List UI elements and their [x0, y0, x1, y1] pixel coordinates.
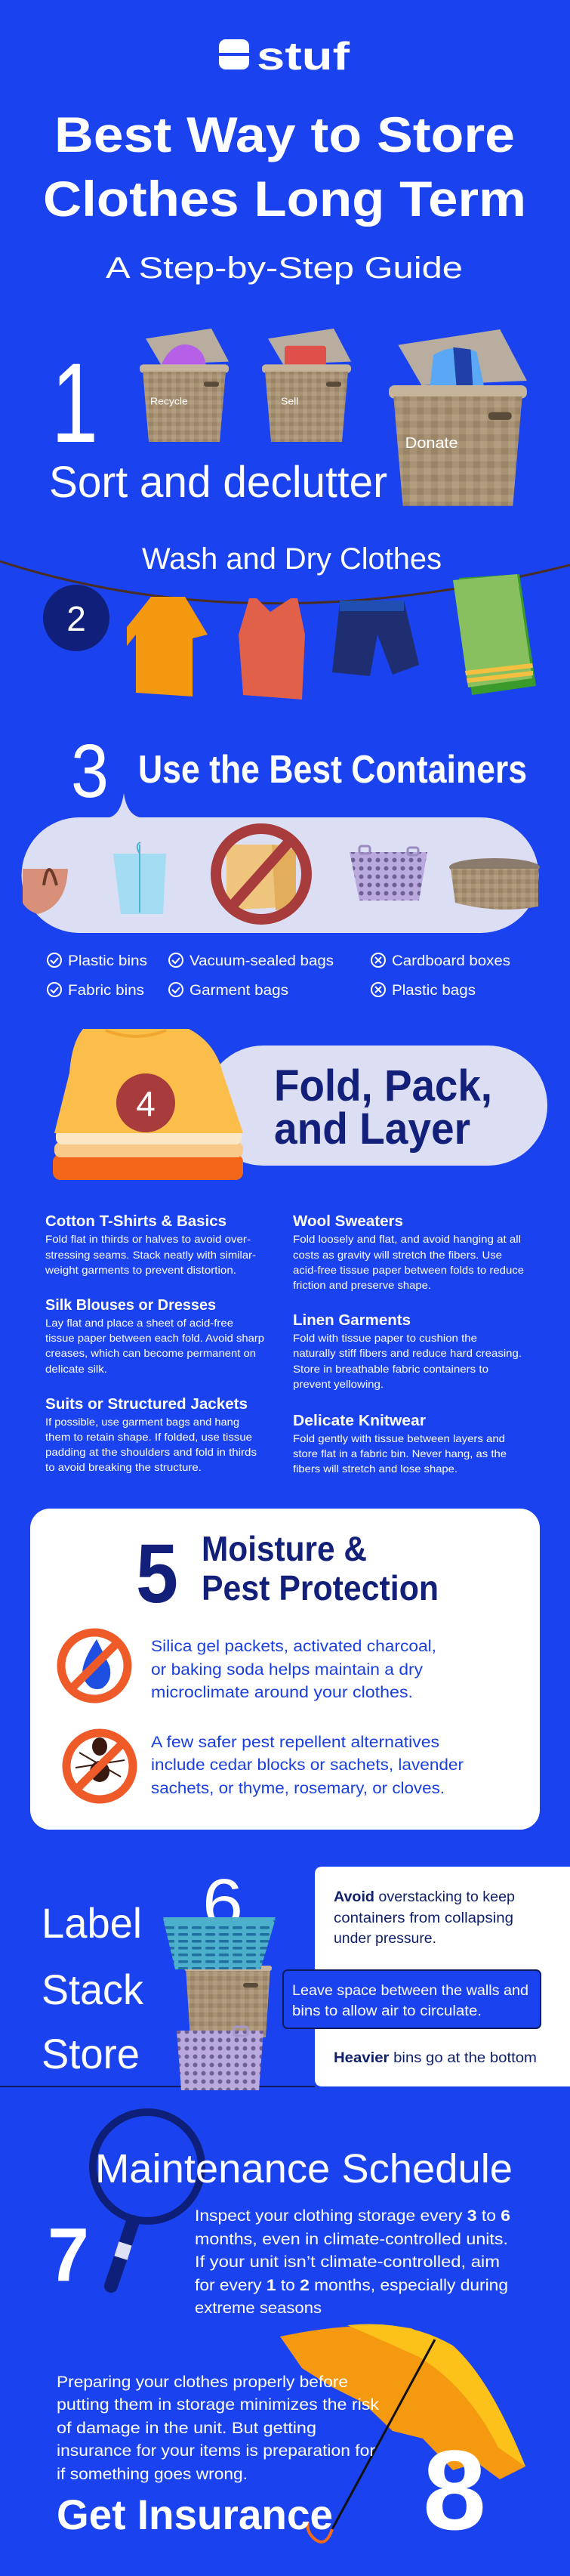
- callout: leave space: bins to allow air to circulate.: [292, 2003, 482, 2019]
- step 8 heading: Get Insurance: [57, 2491, 333, 2538]
- text block: left column tips: creases, which can become permanent on: [45, 1347, 256, 1359]
- step 6 headings: Label: [42, 1899, 142, 1947]
- icon: garment bag: [113, 842, 166, 914]
- text: insurance: if something goes wrong.: [57, 2466, 248, 2483]
- text block: left column tips: Lay flat and place a sheet of acid-free: [45, 1317, 233, 1329]
- step 7 heading: Maintenance Schedule: [95, 2146, 513, 2191]
- tank top: [239, 598, 305, 700]
- step 7 number: 7: [48, 2213, 89, 2297]
- icon: bowl bag: [23, 869, 68, 914]
- basket: donate: Donate: [405, 434, 458, 452]
- panel: moisture & pest protection: 5: [136, 1527, 178, 1620]
- title: Best Way to Store: [54, 107, 515, 162]
- text block: right column tips: naturally stiff fibers and reduce hard creasing.: [293, 1347, 522, 1359]
- text: insurance: putting them in storage minimizes the risk: [57, 2396, 380, 2414]
- panel: stacking tips: under pressure.: [334, 1931, 436, 1947]
- step 6 headings: Stack: [42, 1966, 144, 2013]
- text block: left column tips: tissue paper between each fold. Avoid sharp: [45, 1332, 264, 1344]
- panel: moisture & pest protection: Moisture &: [202, 1529, 367, 1568]
- text: pests: [151, 1734, 464, 1797]
- icon: stacked bins: [163, 1917, 276, 2090]
- text: moisture: microclimate around your clothes.: [151, 1684, 413, 1701]
- text: moisture: Silica gel packets, activated charcoal,: [151, 1638, 436, 1655]
- step 8 number: 8: [423, 2426, 486, 2553]
- panel: moisture & pest protection: [30, 1509, 540, 1830]
- text block: left column tips: stressing seams. Stack neatly with similar-: [45, 1249, 256, 1261]
- step 6 number: 6: [202, 1866, 243, 1941]
- checklist: [48, 953, 510, 999]
- text: insurance: [57, 2374, 380, 2483]
- basket: sell: [262, 329, 351, 442]
- basket: donate: [389, 329, 527, 506]
- panel: fold pack layer: Fold, Pack,: [274, 1061, 492, 1110]
- text: insurance: insurance for your items is preparation for: [57, 2442, 375, 2460]
- text block: right column tips: Fold with tissue paper to cushion the: [293, 1332, 477, 1344]
- text: maintenance: Inspect your clothing storage every 3 to 6: [195, 2207, 510, 2225]
- text: maintenance: months, even in climate-controlled units.: [195, 2231, 508, 2248]
- logo: [219, 35, 350, 79]
- step 2 badge: 2: [66, 599, 86, 638]
- panel: stacking tips: containers from collapsing: [334, 1910, 513, 1926]
- text block: right column tips: Linen Garments: [293, 1312, 411, 1329]
- text block: right column tips: Delicate Knitwear: [293, 1413, 426, 1429]
- icon: no cardboard box: [216, 829, 307, 919]
- title: Clothes Long Term: [43, 171, 526, 227]
- icon: folded shirts stack: 4: [136, 1084, 156, 1123]
- text: moisture: [151, 1638, 436, 1701]
- icon: magnifier: [93, 2112, 202, 2286]
- checklist: Vacuum-sealed bags: [189, 953, 334, 969]
- text block: right column tips: store flat in a fabric bin. Never hang, as the: [293, 1447, 507, 1459]
- text: pests: sachets, or thyme, rosemary, or cloves.: [151, 1780, 445, 1797]
- basket: recycle: Recycle: [150, 396, 188, 407]
- text: moisture: or baking soda helps maintain a dry: [151, 1661, 424, 1679]
- panel: moisture & pest protection: Pest Protection: [202, 1568, 439, 1608]
- step 2 badge: [43, 585, 109, 651]
- callout: leave space: Leave space between the walls and: [292, 1983, 528, 1999]
- checklist: Plastic bins: [68, 953, 147, 969]
- text block: left column tips: padding at the shoulders and fold in thirds: [45, 1446, 257, 1458]
- text: maintenance: [195, 2207, 510, 2317]
- text block: right column tips: Wool Sweaters: [293, 1213, 403, 1230]
- text: insurance: of damage in the unit. But getting: [57, 2420, 316, 2437]
- text block: left column tips: Cotton T-Shirts & Basics: [45, 1213, 226, 1230]
- clothesline: [0, 561, 570, 700]
- icon: folded shirts stack: [53, 1029, 243, 1180]
- text: maintenance: If your unit isn’t climate-controlled, aim: [195, 2253, 500, 2271]
- text block: left column tips: Fold flat in thirds or halves to avoid over-: [45, 1233, 251, 1245]
- icon: no water: [61, 1632, 128, 1699]
- checklist: Plastic bags: [392, 983, 476, 999]
- text block: right column tips: prevent yellowing.: [293, 1378, 384, 1390]
- text: pests: include cedar blocks or sachets, lavender: [151, 1756, 464, 1774]
- text block: left column tips: If possible, use garment bags and hang: [45, 1416, 239, 1428]
- panel: fold pack layer: and Layer: [274, 1104, 470, 1154]
- checklist: Cardboard boxes: [392, 953, 510, 969]
- text block: left column tips: delicate silk.: [45, 1363, 107, 1375]
- text block: right column tips: acid-free tissue paper between folds to reduce: [293, 1264, 524, 1276]
- panel: fold pack layer: [53, 1029, 547, 1180]
- step 2 heading: Wash and Dry Clothes: [142, 542, 442, 576]
- icon: purple basket: [350, 846, 427, 900]
- text: pests: A few safer pest repellent alternatives: [151, 1734, 439, 1751]
- title: [43, 107, 526, 227]
- text block: right column tips: Fold gently with tissue between layers and: [293, 1432, 505, 1444]
- panel: stacking tips: Avoid overstacking to keep: [334, 1889, 515, 1905]
- text block: left column tips: [45, 1213, 264, 1473]
- checklist: Fabric bins: [68, 983, 144, 999]
- text block: left column tips: Silk Blouses or Dresses: [45, 1297, 216, 1314]
- text block: right column tips: [293, 1213, 524, 1475]
- text block: left column tips: them to retain shape. If folded, use tissue: [45, 1431, 252, 1443]
- panel: stacking tips: Heavier bins go at the bottom: [334, 2050, 537, 2066]
- text block: right column tips: friction and preserve shape.: [293, 1279, 431, 1291]
- t-shirt: [127, 597, 208, 697]
- text: insurance: Preparing your clothes properly before: [57, 2374, 348, 2391]
- text block: left column tips: weight garments to prevent distortion.: [45, 1264, 236, 1276]
- text block: right column tips: fibers will stretch and lose shape.: [293, 1463, 458, 1475]
- icon: no pests: [66, 1733, 133, 1799]
- towel: [453, 574, 536, 695]
- step 6 headings: [42, 1899, 144, 2077]
- basket: sell: Sell: [281, 396, 298, 407]
- text block: left column tips: Suits or Structured Jackets: [45, 1396, 248, 1413]
- shorts: [332, 601, 419, 676]
- checklist: Garment bags: [189, 983, 288, 999]
- step 1 number: 1: [51, 339, 98, 466]
- step 6 headings: Store: [42, 2030, 140, 2077]
- panel: containers: [22, 793, 540, 933]
- panel: stacking tips: [283, 1867, 570, 2086]
- text block: right column tips: costs as gravity will stretch the fibers. Use: [293, 1249, 502, 1261]
- icon: umbrella: [280, 2324, 525, 2542]
- text block: left column tips: to avoid breaking the structure.: [45, 1461, 202, 1473]
- text block: right column tips: Store in breathable fabric containers to: [293, 1363, 488, 1375]
- step 3 number: 3: [71, 729, 109, 814]
- text block: right column tips: Fold loosely and flat, and avoid hanging at all: [293, 1233, 521, 1245]
- basket: recycle: [140, 329, 229, 442]
- callout: leave space: [283, 1970, 541, 2028]
- text: maintenance: for every 1 to 2 months, especially during: [195, 2277, 508, 2294]
- step 1 heading: Sort and declutter: [49, 458, 387, 507]
- subtitle: A Step-by-Step Guide: [106, 252, 463, 285]
- logo: stuf: [257, 35, 350, 79]
- icon: wicker basket: [449, 858, 540, 910]
- text: maintenance: extreme seasons: [195, 2300, 322, 2317]
